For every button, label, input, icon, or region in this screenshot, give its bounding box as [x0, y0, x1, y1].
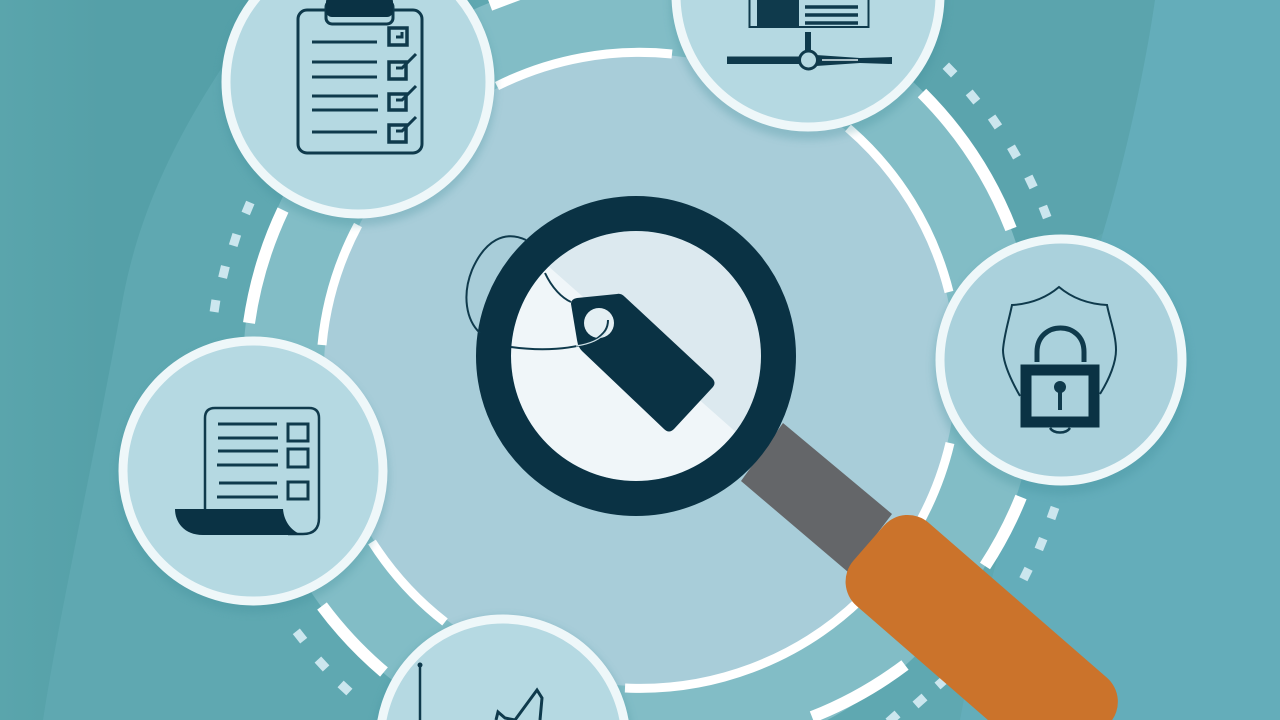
clipboard icon [298, 0, 422, 153]
tag string [511, 273, 608, 349]
dashed outer dots [214, 66, 1055, 720]
document icon [175, 408, 319, 535]
inner white ring segments [322, 52, 950, 688]
tag hole [584, 308, 614, 338]
outer band ring [243, 0, 1037, 720]
padlock [1026, 328, 1094, 432]
chart icon [418, 662, 542, 720]
string loop outside lens [466, 236, 526, 333]
handle shaft [741, 423, 892, 572]
server icon [727, 0, 892, 69]
magnifying glass [466, 200, 1131, 720]
icon circle: line chart [380, 619, 626, 720]
icon circle: padlock and shield [940, 239, 1182, 481]
price tag [571, 294, 714, 432]
central disc [324, 54, 956, 686]
lens glass [511, 231, 761, 481]
handle grip [832, 502, 1131, 720]
lens ring [494, 214, 778, 498]
icon circle: server network [676, 0, 940, 127]
icon circle: document list [123, 341, 383, 601]
icon circle: clipboard [226, 0, 490, 214]
shield outline [1003, 287, 1116, 396]
outer white ring segments [249, 0, 1021, 717]
